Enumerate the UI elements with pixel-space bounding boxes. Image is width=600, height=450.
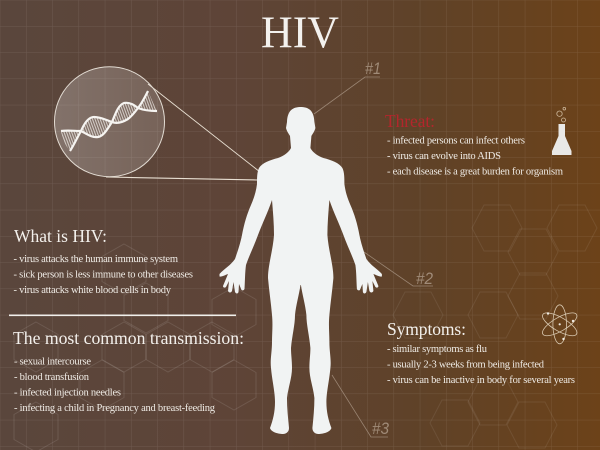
magnifier with DNA helix xyxy=(54,67,164,177)
label #2: #2 xyxy=(416,270,433,288)
list: transmission: - infected injection needles xyxy=(14,388,121,398)
list: transmission: - blood transfusion xyxy=(14,372,90,383)
icon: atom xyxy=(539,305,580,344)
title: HIV xyxy=(261,8,339,58)
list: threat: - each disease is a great burden for organism xyxy=(387,166,563,178)
heading: threat: Threat: xyxy=(385,111,435,131)
list: symptoms: - similar symptoms as flu xyxy=(387,344,488,355)
heading: symptoms: Symptoms: xyxy=(387,319,466,339)
zoom connector lines xyxy=(106,84,260,180)
list: what is HIV: - sick person is less immune to other diseases xyxy=(14,270,193,280)
list: symptoms: - virus can be inactive in body for several years xyxy=(387,375,575,386)
panel: what is HIV xyxy=(14,226,193,296)
callout line #3 xyxy=(332,375,388,437)
list: threat: - infected persons can infect others xyxy=(387,136,525,146)
callout line #2 xyxy=(364,252,433,286)
human body silhouette xyxy=(220,107,382,434)
heading: what is HIV: What is HIV: xyxy=(14,226,107,246)
label #3: #3 xyxy=(372,420,390,438)
heading: transmission: The most common transmission: xyxy=(13,328,244,348)
list: transmission: - sexual intercourse xyxy=(14,356,91,368)
panel: transmission xyxy=(13,328,244,414)
icon: DNA helix xyxy=(61,91,157,151)
list: symptoms xyxy=(387,344,575,386)
panel: symptoms xyxy=(387,319,575,386)
divider xyxy=(9,314,236,316)
callout line #1 xyxy=(314,77,380,114)
list: threat: - virus can evolve into AIDS xyxy=(387,151,501,162)
list: transmission: - infecting a child in Pregnancy and breast-feeding xyxy=(14,403,216,414)
list: what is HIV: - virus attacks white blood cells in body xyxy=(14,285,172,296)
list: transmission xyxy=(14,356,216,414)
list: threat xyxy=(387,136,563,178)
list: what is HIV xyxy=(14,254,193,296)
list: what is HIV: - virus attacks the human immune system xyxy=(14,254,178,265)
label #1: #1 xyxy=(365,60,381,78)
icon: flask xyxy=(552,107,572,155)
list: symptoms: - usually 2-3 weeks from being infected xyxy=(387,360,545,370)
panel: threat xyxy=(385,111,563,178)
magnifier lens xyxy=(54,67,164,177)
